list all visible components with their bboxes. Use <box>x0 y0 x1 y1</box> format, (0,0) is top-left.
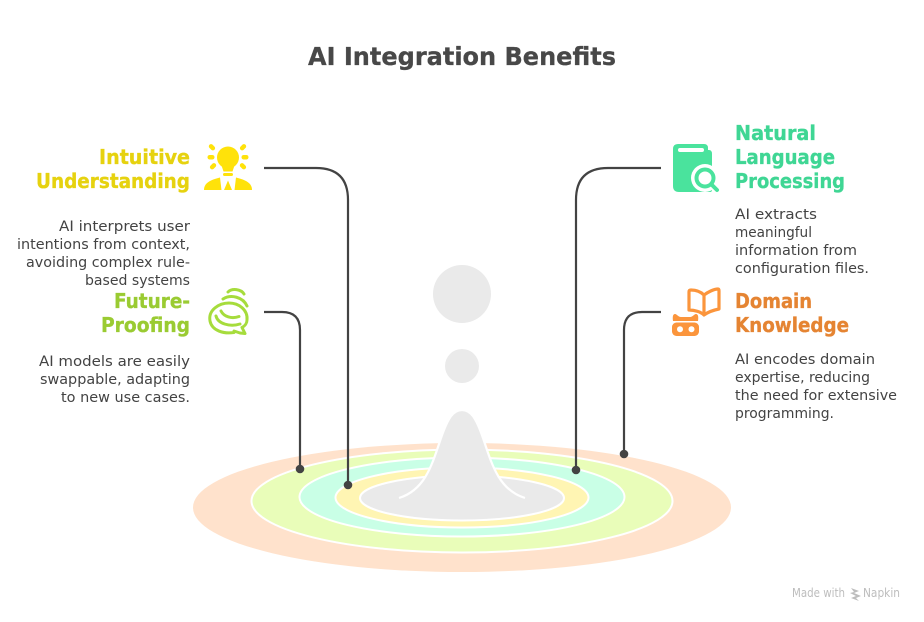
heading: intuitive understanding: Intuitive <box>99 145 190 169</box>
text block: domain knowledge: programming. <box>735 406 834 422</box>
text block: domain knowledge <box>735 352 897 422</box>
concentric ripple diagram <box>193 265 731 572</box>
connector: intuitive understanding <box>264 168 352 489</box>
watermark: made with napkin: Napkin <box>863 586 900 600</box>
icon: book with magnifier <box>673 144 719 192</box>
droplet: small <box>445 349 479 383</box>
text block: intuitive understanding: AI interprets user <box>59 219 190 235</box>
droplet: large <box>433 265 491 323</box>
heading line: language: Language <box>735 145 835 169</box>
icon: lightbulb person <box>204 143 252 190</box>
ring: center <box>360 476 564 520</box>
heading: future-proofing: Future- <box>114 289 190 313</box>
connector: domain knowledge <box>620 312 661 458</box>
text block: domain knowledge: AI encodes domain <box>735 352 875 368</box>
ring: future-proofing <box>252 450 672 552</box>
splash outline <box>399 410 525 498</box>
text block: intuitive understanding <box>17 219 190 289</box>
ring: intuitive understanding <box>336 468 588 528</box>
ring: natural language processing <box>300 458 624 536</box>
text block: natural language processing: AI extracts <box>735 207 817 223</box>
icon: chat bubble swirl <box>210 290 247 334</box>
text block: intuitive understanding: avoiding complex rule- <box>26 255 190 271</box>
text block: natural language processing: information from <box>735 243 857 259</box>
connector: future-proofing <box>264 312 304 473</box>
title: AI Integration Benefits <box>308 42 616 71</box>
text block: domain knowledge: the need for extensive <box>735 388 897 404</box>
heading line: understanding: Understanding <box>36 169 190 193</box>
heading line: processing: Processing <box>735 169 845 193</box>
text block: intuitive understanding: based systems <box>85 273 190 289</box>
ring: domain knowledge <box>193 443 731 572</box>
text block: intuitive understanding: intentions from context, <box>17 237 190 253</box>
text block: future-proofing <box>39 354 190 406</box>
icon: open book and robot <box>672 289 719 336</box>
watermark: made with napkin <box>792 586 900 601</box>
text block: future-proofing: swappable, adapting <box>40 372 190 388</box>
text block: domain knowledge: expertise, reducing <box>735 370 870 386</box>
watermark: made with napkin: Made with <box>792 586 845 600</box>
heading line: knowledge: Knowledge <box>735 313 849 337</box>
heading: domain knowledge: Domain <box>735 289 812 313</box>
heading: natural language processing: Natural <box>735 121 816 145</box>
text block: future-proofing: AI models are easily <box>39 354 190 370</box>
text block: natural language processing: meaningful <box>735 225 812 241</box>
heading line: proofing: Proofing <box>101 313 190 337</box>
water splash peak <box>399 410 525 498</box>
text block: future-proofing: to new use cases. <box>61 390 190 406</box>
text block: natural language processing: configuration files. <box>735 261 869 277</box>
connector: natural language processing <box>572 168 661 474</box>
text block: natural language processing <box>735 207 869 277</box>
